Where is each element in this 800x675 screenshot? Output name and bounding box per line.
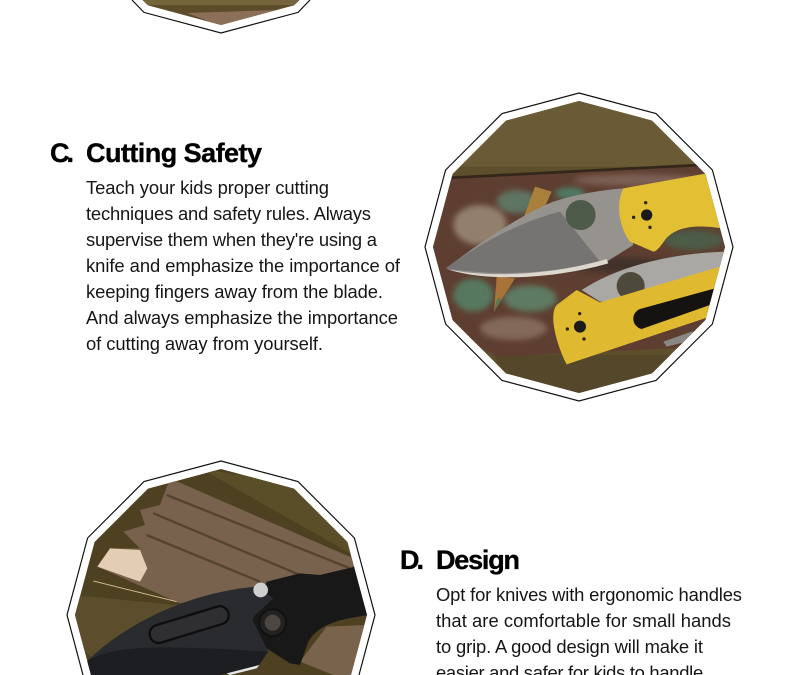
text block: Cutting Safety description: techniques and safety rules. Always [86,203,371,224]
text block: Cutting Safety description: And always emphasize the importance [86,307,398,328]
image frame: yellow-handled serrated knives [420,85,740,405]
text block: Design description: that are comfortable for small hands [436,610,731,631]
text block: Cutting Safety description: of cutting away from yourself. [86,333,323,354]
text block: Cutting Safety description: supervise them when they're using a [86,229,378,250]
text block: Cutting Safety description: knife and emphasize the importance of [86,255,401,276]
text block: Design description: to grip. A good design will make it [436,636,703,657]
image frame: previous section knife photo (cropped at top) [130,0,320,33]
heading: D. Design: Design [436,545,520,575]
text block: Cutting Safety description: Teach your kids proper cutting [86,177,329,198]
text block: Design description [436,584,742,675]
heading: C. Cutting Safety: C. [50,138,74,168]
heading: C. Cutting Safety: Cutting Safety [86,138,262,168]
text block: Cutting Safety description: keeping fingers away from the blade. [86,281,383,302]
heading: D. Design: D. [400,545,424,575]
text block: Cutting Safety description [86,177,401,354]
text block: Design description: Opt for knives with ergonomic handles [436,584,742,605]
image frame: black folding knife on bark [60,455,380,675]
